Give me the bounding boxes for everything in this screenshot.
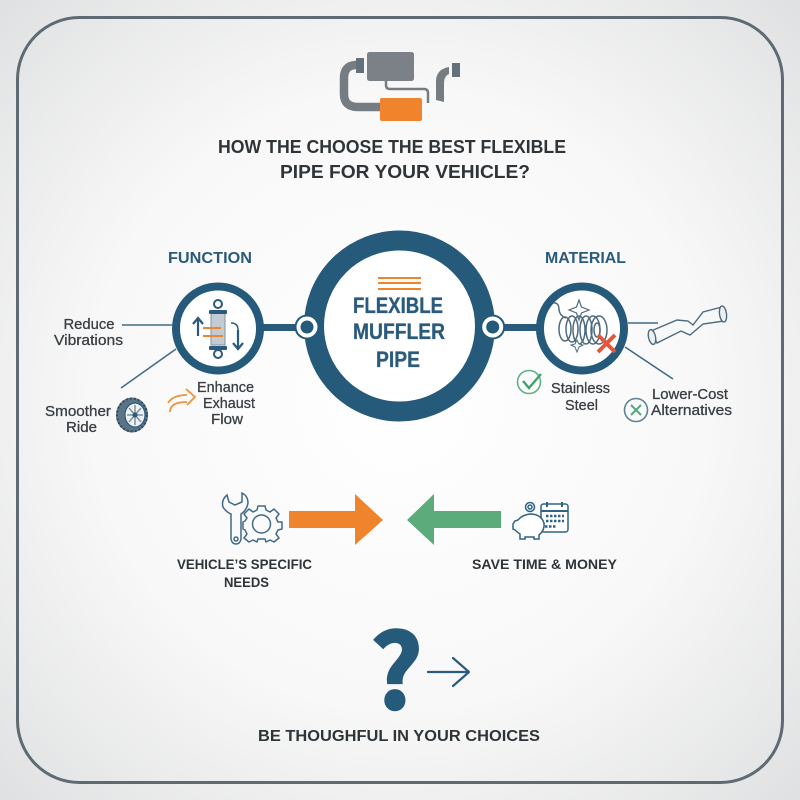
heading: function: FUNCTION xyxy=(168,250,252,267)
label: stainless steel xyxy=(551,380,610,414)
icon: x circle xyxy=(624,398,648,422)
label: lower-cost alternatives: Lower-Cost xyxy=(652,386,729,403)
label: enhance exhaust flow: Exhaust xyxy=(203,395,256,412)
title: PIPE FOR YOUR VEHICLE? xyxy=(280,162,530,182)
label: vehicle's specific needs xyxy=(177,556,312,590)
closing line: BE THOUGHFUL IN YOUR CHOICES xyxy=(258,728,540,745)
icon: tire xyxy=(116,398,148,432)
label: vehicle's specific needs: VEHICLE’S SPECIFIC xyxy=(177,556,312,572)
label: stainless steel: Steel xyxy=(565,397,598,414)
hub label: FLEXIBLE xyxy=(353,293,443,318)
icon: muffler pipe xyxy=(344,52,460,121)
label: enhance exhaust flow: Enhance xyxy=(197,379,254,396)
title xyxy=(218,137,566,182)
label: reduce vibrations: Vibrations xyxy=(54,332,123,349)
label: smoother ride: Ride xyxy=(66,419,97,436)
label: enhance exhaust flow xyxy=(197,379,256,428)
label: enhance exhaust flow: Flow xyxy=(211,411,243,428)
left connector node xyxy=(294,314,320,340)
icon: broken pipe with connector xyxy=(628,306,728,345)
label: stainless steel: Stainless xyxy=(551,380,610,397)
material circle with coiled steel icon xyxy=(540,286,624,370)
hub label: MUFFLER xyxy=(353,319,445,344)
arrow: question pointer xyxy=(428,658,469,686)
icon: piggy bank and calendar xyxy=(513,502,568,539)
icon: green check xyxy=(518,370,541,394)
label: reduce vibrations: Reduce xyxy=(64,316,114,333)
icon: wrench and gear xyxy=(222,493,282,544)
title: HOW THE CHOOSE THE BEST FLEXIBLE xyxy=(218,137,566,157)
label: smoother ride: Smoother xyxy=(45,403,111,420)
orange pipe lines xyxy=(378,277,421,290)
red cross xyxy=(598,335,615,352)
central hub: flexible muffler pipe xyxy=(314,240,485,412)
label: lower-cost alternatives: Alternatives xyxy=(651,402,732,419)
arrow: green xyxy=(407,494,501,545)
label: reduce vibrations xyxy=(54,316,172,349)
hub label xyxy=(353,293,445,372)
label: save time and money: SAVE TIME & MONEY xyxy=(472,556,618,572)
label: smoother ride xyxy=(45,349,176,436)
hub label: PIPE xyxy=(376,347,420,372)
connectors between central hub and side circles xyxy=(262,324,539,331)
label: lower-cost alternatives xyxy=(625,347,732,419)
function circle with shock absorber icon xyxy=(176,286,260,370)
icon: orange flow arrow xyxy=(168,389,195,412)
right connector node xyxy=(480,314,505,340)
label: vehicle's specific needs: NEEDS xyxy=(224,574,269,590)
question mark: ? xyxy=(370,592,423,738)
heading: material: MATERIAL xyxy=(545,250,626,267)
arrow: orange xyxy=(289,494,383,545)
